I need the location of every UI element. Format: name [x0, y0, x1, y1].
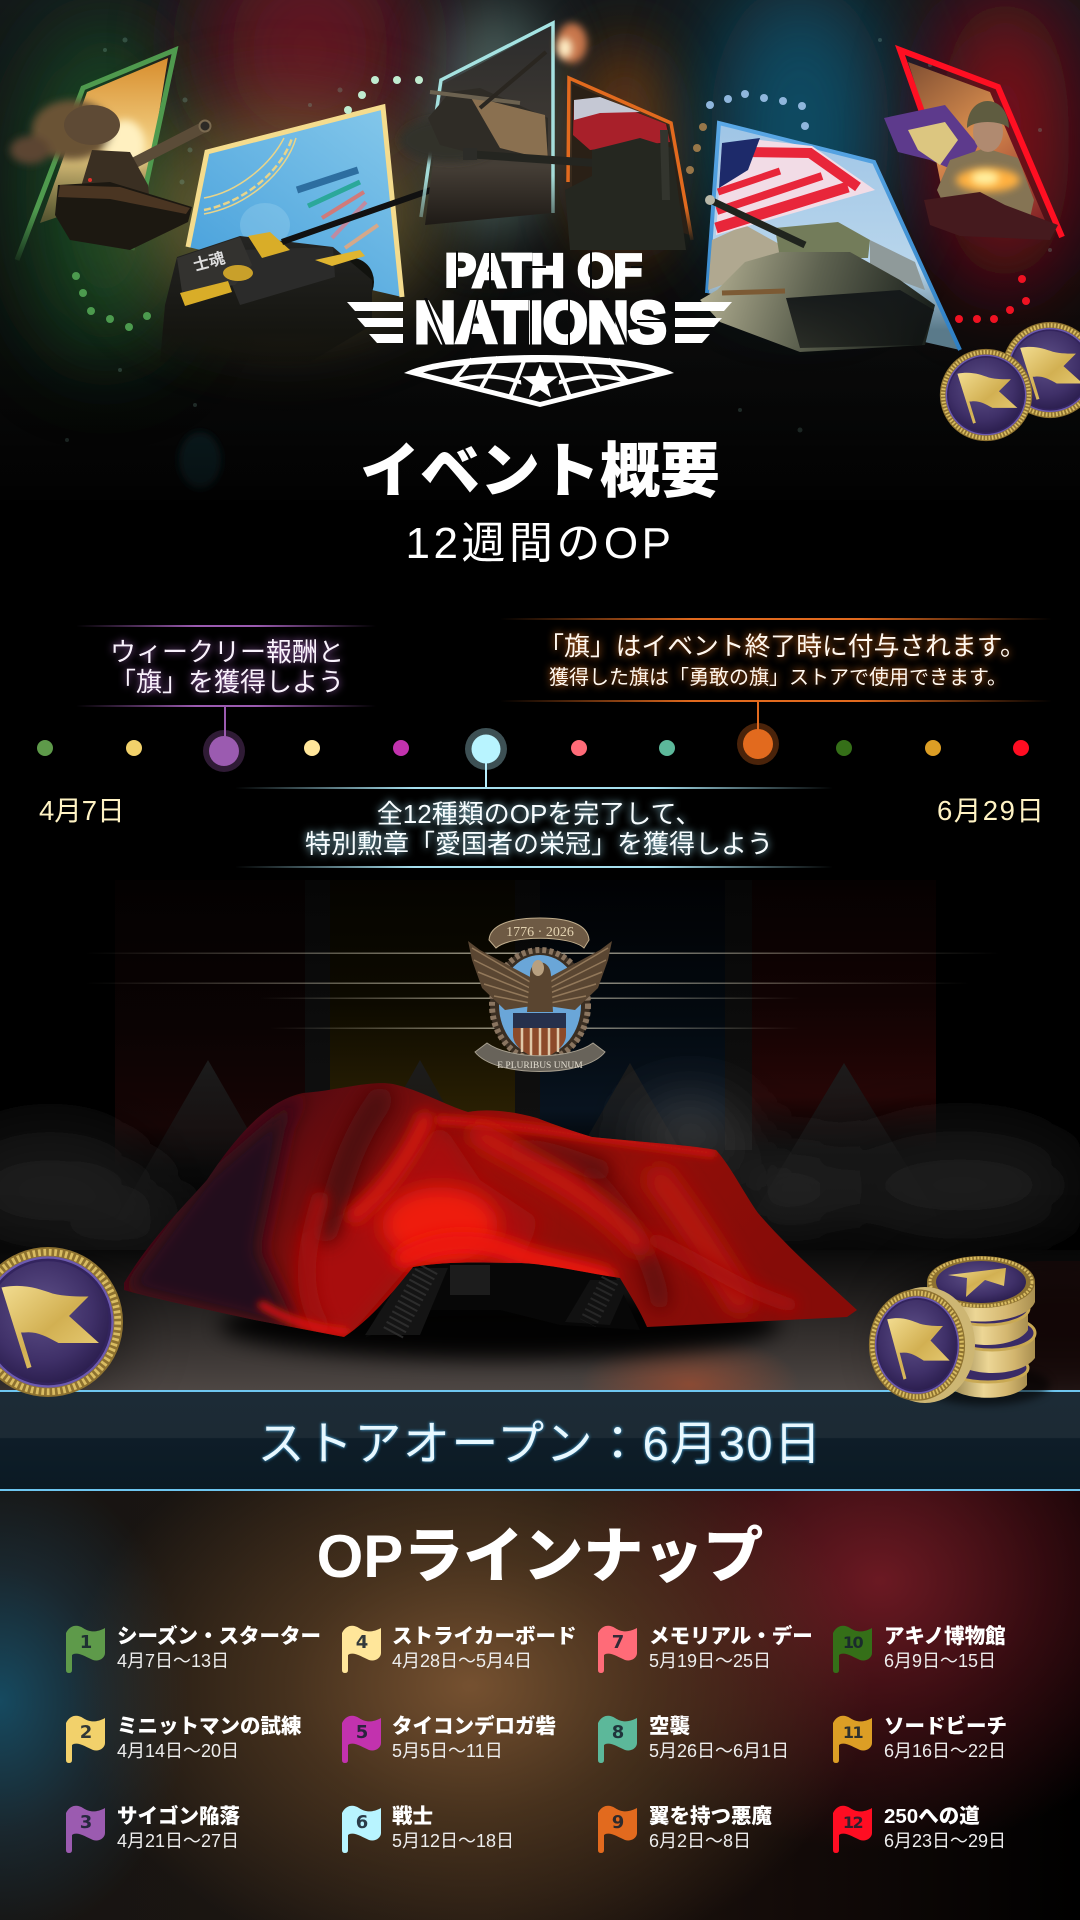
tank: [775, 222, 870, 258]
heading: event overview: イベント概要: [360, 438, 720, 505]
callout: special medal: 全12種類のOPを完了して、: [377, 799, 701, 829]
tank hull: [330, 258, 374, 306]
logo stencil cuts: [424, 251, 669, 346]
card 2: yellow, blue sky and black and gold tank: 士魂: [190, 244, 227, 276]
lineup item 7: 7: [612, 1632, 623, 1653]
lineup item 2: ミニットマンの試練: [117, 1715, 302, 1738]
lineup item 11: 11: [843, 1723, 862, 1742]
lineup item 9: [598, 1805, 772, 1853]
lineup item 9: 6月2日～8日: [649, 1831, 751, 1851]
lineup item 9: 翼を持つ悪魔: [649, 1805, 772, 1828]
lineup item 12: 250への道: [884, 1805, 980, 1828]
lineup item 6: 戦士: [392, 1805, 433, 1828]
bottom banner: [475, 1043, 605, 1072]
lineup item 2: 2: [80, 1722, 91, 1743]
lineup item 9: 9: [612, 1812, 623, 1833]
lineup item 11: 6月16日～22日: [884, 1741, 1006, 1761]
lineup item 8: 5月26日～6月1日: [649, 1741, 789, 1761]
medal: patriot's laurels: E PLURIBUS UNUM: [497, 1061, 583, 1071]
callout: flags granted at event end: [507, 618, 1045, 730]
building: [708, 225, 790, 290]
callout: weekly rewards: 「旗」を獲得しよう: [110, 666, 344, 696]
card 5: blue, American flag and Sherman tank: [700, 123, 960, 352]
lineup item 1: [66, 1624, 321, 1673]
lineup item 5: [342, 1714, 556, 1763]
gun barrel: [282, 184, 448, 242]
floating dotted arcs: [72, 76, 1030, 331]
card 4: orange, red flag with dark tank: [463, 78, 692, 250]
medal light rays: [85, 952, 1000, 1029]
lineup item 10: アキノ博物館: [884, 1625, 1006, 1648]
lineup item 1: 4月7日～13日: [117, 1651, 229, 1671]
curtain bands: [115, 880, 936, 1170]
card 2: yellow, blue sky and black and gold tank: [160, 107, 455, 362]
lineup item 6: [342, 1805, 514, 1853]
lineup item 4: 4月28日～5月4日: [392, 1651, 532, 1671]
dust particles: [38, 38, 1052, 442]
callout: flags granted at event end: 「旗」はイベント終了時に付与されます。: [538, 633, 1026, 661]
lineup item 3: [66, 1804, 240, 1853]
store open band: [0, 1390, 1080, 1491]
medal: patriot's laurels: 1776 · 2026: [506, 925, 574, 940]
lineup item 3: 3: [80, 1812, 91, 1833]
hero artwork: six event cards with tanks: [0, 0, 1080, 490]
lineup item 4: ストライカーボード: [392, 1625, 576, 1648]
logo wordmark: NATIONS: [414, 290, 666, 356]
lineup item 8: 8: [612, 1722, 623, 1743]
coin stack at right: [869, 1256, 1050, 1405]
logo: Path of Nations: [347, 245, 732, 407]
top banner: [489, 918, 589, 948]
lineup item 6: 5月12日～18日: [392, 1831, 514, 1851]
lineup item 4: 4: [356, 1632, 367, 1653]
showcase stage: curtains, medal and covered tank: [0, 903, 1080, 1390]
lineup item 8: 空襲: [649, 1715, 690, 1738]
lineup item 3: サイゴン陥落: [117, 1805, 240, 1828]
lineup item 11: ソードビーチ: [884, 1715, 1007, 1738]
logo wing stripes: [347, 302, 732, 343]
logo emblem with star: [404, 355, 674, 407]
callout: weekly rewards: [82, 625, 370, 736]
mountain silhouettes: [116, 1060, 940, 1220]
lineup item 12: 12: [843, 1813, 862, 1832]
shield: [513, 1013, 566, 1060]
smoke: [0, 1103, 1080, 1255]
foreground coins over store band: [0, 1247, 1054, 1408]
card 3: pale cyan, firing tank: [400, 23, 587, 225]
lineup item 10: 10: [843, 1633, 862, 1652]
lineup item 5: 5: [356, 1722, 367, 1743]
eagle wings: [468, 941, 532, 1010]
lineup item 1: シーズン・スターター: [117, 1625, 321, 1648]
lineup item 11: [833, 1714, 1007, 1763]
lineup item 7: 5月19日～25日: [649, 1651, 771, 1671]
lineup item 1: 1: [80, 1632, 91, 1653]
callout: flags granted at event end: 獲得した旗は「勇敢の旗」ストアで使用できます。: [549, 667, 1007, 689]
lineup item 12: [833, 1805, 1006, 1853]
commander: [937, 148, 1034, 218]
gold fittings: [180, 281, 232, 306]
lineup item 2: [66, 1715, 302, 1763]
lineup item 5: タイコンデロガ砦: [392, 1715, 556, 1738]
logo wordmark: PATH OF: [445, 245, 642, 296]
lineup item 12: 6月23日～29日: [884, 1831, 1006, 1851]
timeline dots: [37, 723, 1029, 772]
lineup item 5: 5月5日～11日: [392, 1741, 503, 1761]
stage floor: [0, 1250, 1080, 1435]
store open date: ストアオープン：6月30日: [257, 1417, 823, 1470]
flag stripes: [716, 138, 875, 235]
lineup item 8: [598, 1715, 789, 1763]
tank tracks under the cloth: [365, 1262, 640, 1338]
card 1: green, explosion with tank: [10, 50, 210, 260]
lineup heading: OPラインナップ: [317, 1523, 763, 1590]
coloured light columns behind cards: [25, 0, 1070, 488]
large coin at left edge: [0, 1247, 123, 1397]
timeline end date: 6月29日: [937, 795, 1045, 826]
cannon: [130, 127, 204, 165]
lineup item 7: メモリアル・デー: [649, 1625, 813, 1648]
lineup item 6: 6: [356, 1812, 367, 1833]
lineup item 3: 4月21日～27日: [117, 1831, 239, 1851]
lineup item 7: [598, 1624, 813, 1673]
lineup item 4: [342, 1625, 576, 1673]
card 6: red, commander portrait and purple flag: [884, 50, 1062, 240]
medal: patriot's laurels: [468, 918, 612, 1072]
red cloth over the tank: [124, 1083, 857, 1337]
timeline start date: 4月7日: [39, 795, 125, 826]
reward coins: [940, 322, 1080, 441]
lineup item 10: [833, 1625, 1006, 1673]
OP lineup panel: [0, 1491, 1080, 1920]
callout: special medal: 特別勲章「愛国者の栄冠」を獲得しよう: [305, 829, 773, 859]
lineup item 2: 4月14日～20日: [117, 1741, 239, 1761]
callout: weekly rewards: ウィークリー報酬と: [110, 637, 344, 667]
callout: special medal: [242, 763, 827, 868]
logo wordmark: [414, 244, 666, 356]
lineup item 10: 6月9日～15日: [884, 1651, 996, 1671]
subheading: twelve weeks of OP: 12週間のOP: [405, 519, 674, 568]
